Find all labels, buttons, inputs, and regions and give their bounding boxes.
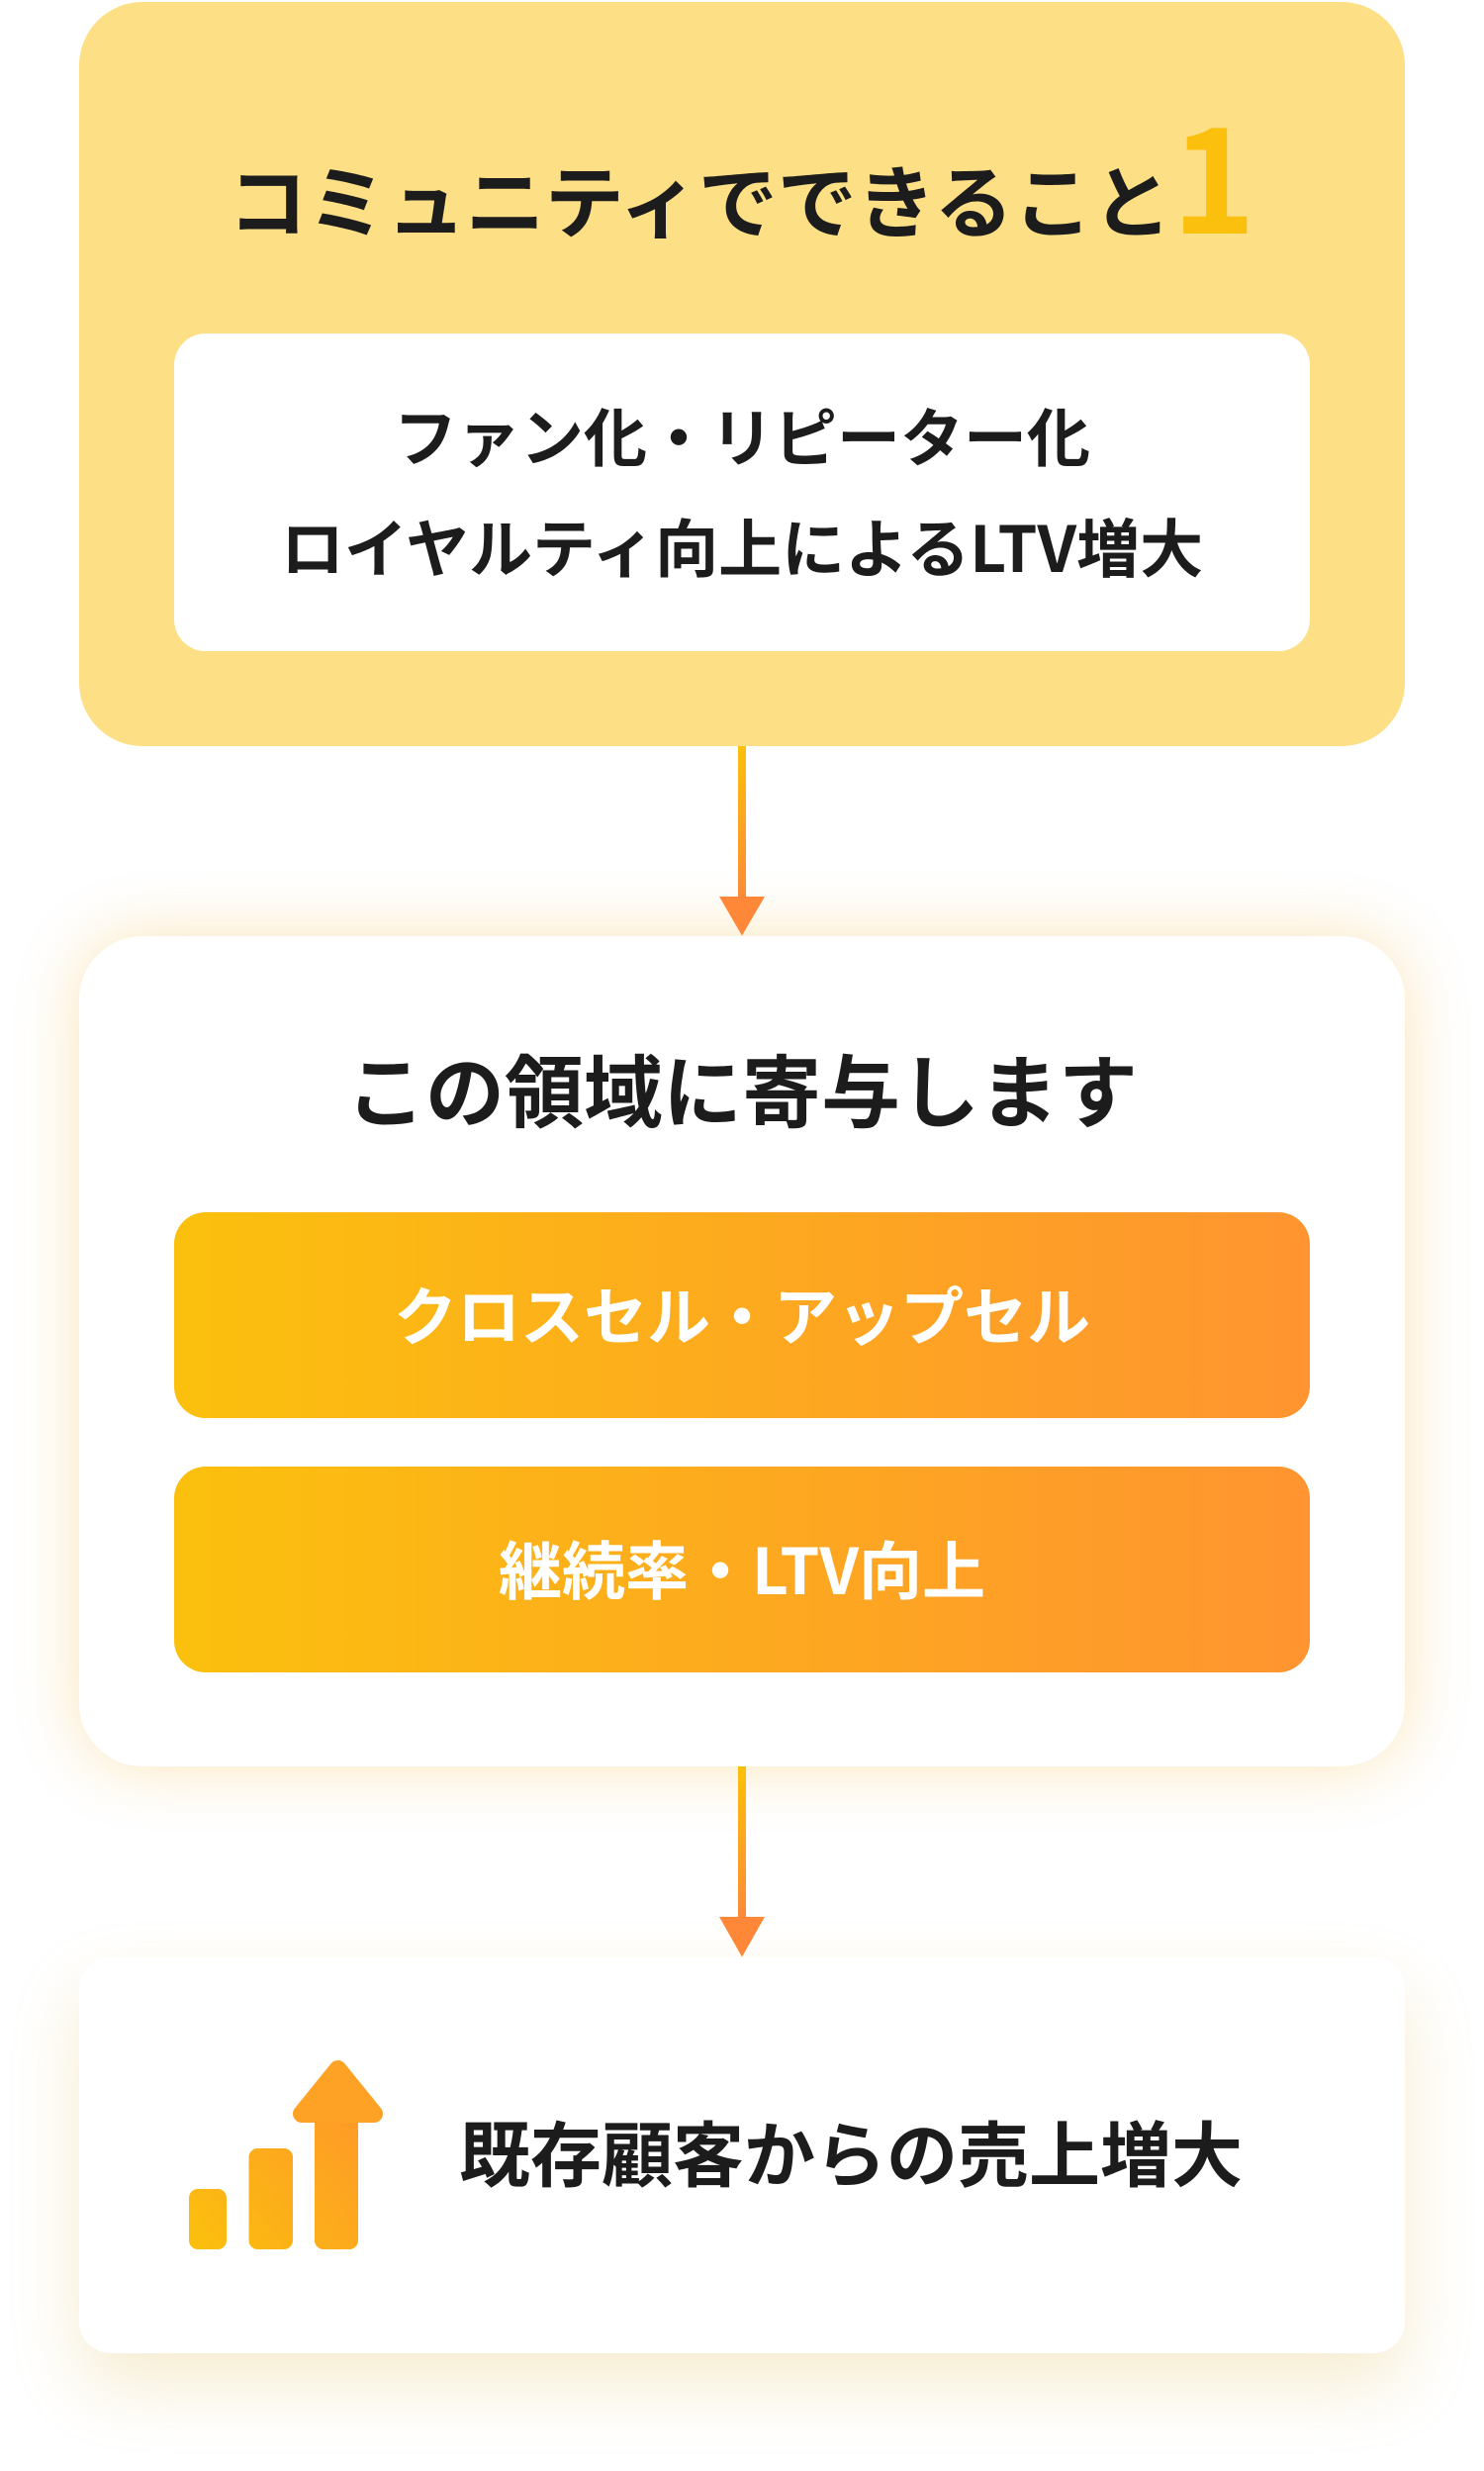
button: cross-sell and up-sell (174, 1212, 1310, 1418)
text: sales increase: 既存顧客からの売上増大 (459, 2098, 1243, 2202)
text: fan and repeater: ファン化・リピーター化 (394, 389, 1090, 480)
card: fan and loyalty (174, 333, 1310, 651)
icon: rising bars with arrow (189, 2060, 383, 2249)
panel: community capabilities (79, 2, 1405, 746)
panel: contribution areas (79, 936, 1405, 1766)
label: retention: 継続率・LTV向上 (499, 1522, 985, 1613)
heading: contributes to this area: この領域に寄与します (346, 1030, 1138, 1145)
arrow: community to contribution (719, 746, 765, 936)
arrow: contribution to sales (719, 1766, 765, 1957)
button: retention and LTV (174, 1467, 1310, 1672)
heading: community capabilities: コミュニティでできること1 (229, 69, 1255, 275)
text: loyalty and LTV: ロイヤルティ向上によるLTV増大 (281, 500, 1203, 591)
label: cross-sell: クロスセル・アップセル (394, 1268, 1090, 1359)
panel: sales increase (79, 1957, 1405, 2353)
